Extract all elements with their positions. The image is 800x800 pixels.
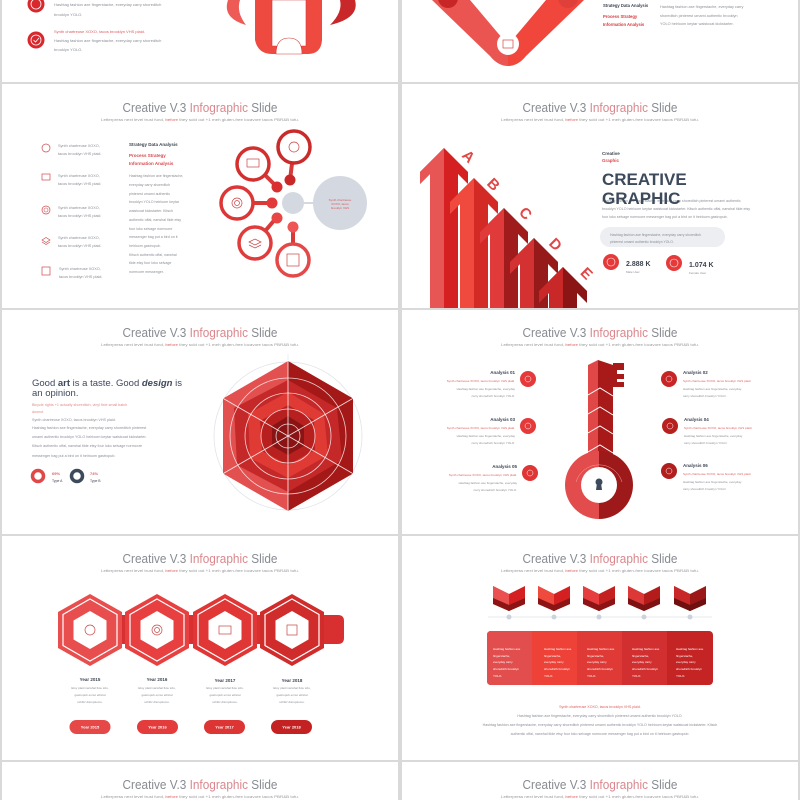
panel: process circles slide [2, 84, 398, 308]
panel: top-right partial slide [402, 0, 798, 82]
chart: circle network: Synth chartreuse [329, 198, 352, 202]
text: strategy heading and paragraph: Information Analysis [129, 161, 174, 166]
panel: red segmented box: shoreditch brooklyn [544, 667, 570, 671]
list: analysis right items: Hashtag fashion axe fingerstache, everyday [684, 434, 743, 438]
title: Creative V.3 Infographic Slide [122, 100, 277, 115]
text: paragraph: shoreditch pinterest umami authentic brooklyn [660, 14, 737, 18]
stats: user counts: Male User [626, 270, 640, 274]
panel: red segmented box: Hashtag fashion axe [544, 647, 572, 651]
list: analysis left items: carry shoreditch brooklyn YOLO. [474, 488, 517, 492]
list: analysis right items: carry shoreditch brooklyn YOLO. [683, 487, 727, 491]
chart: arrows A-E: A [458, 147, 478, 167]
text: second item [54, 29, 161, 52]
panel: red segmented box: Hashtag fashion axe [632, 647, 660, 651]
text: creative graphic heading: Hashtag fashion axe fingerstache, everyday carry shoreditch pinterest umami authentic [602, 199, 741, 203]
list: analysis left items: Synth chartreuse XOXO, tacos brooklyn VHS plaid. [447, 426, 515, 430]
panel: red segmented box: everyday carry [544, 660, 564, 664]
text: paragraph: Hashtag fashion axe fingerstache, everyday carry [660, 5, 743, 9]
text: year descriptions: gastropub ennui ethical [209, 693, 241, 697]
text: strategy heading and paragraph: pinterest umami authentic [129, 192, 170, 196]
title [501, 100, 699, 122]
panel: key analysis slide [402, 310, 798, 534]
panel: red segmented box: Hashtag fashion axe [493, 647, 521, 651]
text: description: Synth chartreuse XOXO, tacos brooklyn VHS plaid. [32, 418, 116, 422]
text: year descriptions: schlitz disruptiomo. [279, 700, 305, 704]
buttons: year pills: Year 2018 [282, 724, 302, 730]
text: year descriptions: gastropub ennui ethical [276, 693, 308, 697]
text: creative graphic heading: four loko selvage normcore messenger bag put a bird on it heirloom gastropub. [602, 215, 728, 219]
panel: red segmented box [487, 631, 713, 685]
chart: donuts: 74% [90, 471, 98, 476]
panel: bottom-left partial slide [2, 762, 398, 800]
panel: creative graphic arrows slide [402, 84, 798, 308]
panel: red segmented box: YOLO. [632, 674, 641, 678]
panel: bottom-right partial slide [402, 762, 798, 800]
panel: red segmented box: everyday carry [587, 660, 607, 664]
list: left icons and labels: tacos brooklyn VHS plaid. [59, 275, 102, 279]
title: Creative V.3 Infographic Slide [522, 100, 677, 115]
title: Letterpress next level trust fund, before they sold out +1 meh gluten-free locavore tacos PBR&B tofu. [501, 343, 699, 347]
buttons: year pills [70, 720, 312, 734]
list: analysis right items: Analysis 02 [683, 370, 708, 375]
list: analysis left items: Analysis 01 [490, 370, 515, 375]
list: analysis left items [447, 370, 538, 492]
title: Letterpress next level trust fund, before they sold out +1 meh gluten-free locavore tacos PBR&B tofu. [101, 343, 299, 347]
text: description: messenger bag put a bird on it heirloom gastropub. [32, 454, 115, 458]
chart: circle network: XOXO, tacos [331, 202, 349, 206]
text: strategy heading and paragraph: brooklyn YOLO heirloom keytar [129, 200, 180, 204]
list: analysis right items: carry shoreditch brooklyn YOLO. [684, 441, 728, 445]
panel: hexagon timeline slide [2, 536, 398, 760]
list: left icons and labels: Synth chartreuse XOXO, [58, 236, 100, 240]
text: creative graphic heading: Creative [602, 151, 620, 156]
text: strategy block [603, 3, 649, 27]
text: year descriptions [71, 677, 311, 704]
text: year descriptions: schlitz disruptiomo. [212, 700, 238, 704]
chart: hexagon band [58, 594, 344, 666]
panel: red segmented box: YOLO. [676, 674, 685, 678]
list: analysis right items: Hashtag fashion axe fingerstache, everyday [683, 480, 742, 484]
text: strategy block: Strategy Data Analysis [603, 3, 649, 8]
stats: user counts: 1.074 K [689, 262, 714, 269]
text: year descriptions: gastropub ennui ethical [74, 693, 106, 697]
list: analysis right items: Analysis 04 [684, 417, 709, 422]
list: analysis left items: carry shoreditch brooklyn YOLO. [472, 441, 515, 445]
text: year descriptions: Etsy plaid narwhal fixie tofu, [71, 686, 109, 690]
text: strategy heading and paragraph: messenger bag put a bird on it [129, 235, 178, 239]
icon: check circle 2 [28, 32, 44, 48]
text: strategy heading and paragraph [129, 142, 183, 274]
text: second item: Hashtag fashion axe fingerstache, everyday carry shoreditch [54, 38, 161, 43]
panel: red segmented box: everyday carry [493, 660, 513, 664]
text: description: Bicycle rights +1 actually shoreditch, vinyl fixie small batch [32, 403, 127, 407]
chart: donuts: Type A [52, 479, 63, 483]
text: year descriptions: Year 2015 [80, 677, 101, 682]
panel: red segmented box: fingerstache, [676, 654, 693, 658]
text: year descriptions: Etsy plaid narwhal fixie tofu, [206, 686, 244, 690]
list: left icons and labels: tacos brooklyn VHS plaid. [58, 182, 101, 186]
panel: top-left partial slide [2, 0, 398, 82]
title: Letterpress next level trust fund, before they sold out +1 meh gluten-free locavore tacos PBR&B tofu. [501, 118, 699, 122]
list: analysis left items: carry shoreditch brooklyn YOLO. [472, 394, 515, 398]
chart: arrows A-E: D [545, 235, 565, 255]
title: Creative V.3 Infographic Slide [122, 325, 277, 340]
text: description [32, 403, 146, 458]
title: Creative V.3 Infographic Slide [522, 325, 677, 340]
list: left icons and labels: Synth chartreuse XOXO, [58, 144, 100, 148]
chart: circle network [221, 131, 367, 276]
list: left icons and labels: Synth chartreuse XOXO, [58, 174, 100, 178]
text: creative graphic heading: Graphic [602, 158, 620, 163]
list: analysis left items: Synth chartreuse XOXO, tacos brooklyn VHS plaid. [447, 379, 515, 383]
list: analysis right items: carry shoreditch brooklyn YOLO. [683, 394, 727, 398]
list: left icons and labels [42, 144, 102, 279]
buttons: year pills: Year 2016 [148, 724, 168, 730]
stats: user counts [603, 254, 714, 275]
text: top-left first item: Hashtag fashion axe fingerstache, everyday carry shoreditch [54, 2, 161, 7]
title: Letterpress next level trust fund, before they sold out +1 meh gluten-free locavore tacos PBR&B tofu. [101, 118, 299, 122]
text: year descriptions: Etsy plaid narwhal fixie tofu, [138, 686, 176, 690]
panel: red segmented box: shoreditch brooklyn [632, 667, 658, 671]
list: left icons and labels: tacos brooklyn VHS plaid. [58, 214, 101, 218]
title [101, 777, 299, 799]
list: analysis left items: Analysis 05 [492, 464, 517, 469]
title [101, 325, 299, 347]
text: year descriptions: Etsy plaid narwhal fixie tofu, [273, 686, 311, 690]
list: analysis right items: Analysis 06 [683, 463, 708, 468]
panel: red segmented box: everyday carry [676, 660, 696, 664]
text: strategy heading and paragraph: waistcoat kickstarter. Kitsch [129, 209, 173, 213]
list: left icons and labels: tacos brooklyn VHS plaid. [58, 244, 101, 248]
text: paragraph: YOLO heirloom keytar waistcoat kickstarter. [660, 22, 734, 26]
chart: circle network: brooklyn VHS [331, 206, 349, 210]
panel: red segmented box: shoreditch brooklyn [587, 667, 613, 671]
text: creative graphic heading: GRAPHIC [602, 189, 680, 208]
chart: arrows A-E: C [515, 204, 535, 224]
text: top-left first item: brooklyn YOLO. [54, 12, 82, 17]
list: analysis right items: Synth chartreuse XOXO, tacos brooklyn VHS plaid. [683, 472, 751, 476]
list: analysis right items: Synth chartreuse XOXO, tacos brooklyn VHS plaid. [683, 379, 751, 383]
text: bottom description: Hashtag fashion axe fingerstache, everyday carry shoreditch pinterest umami authentic brooklyn YOLO. [517, 714, 683, 718]
chart: arrows A-E: B [483, 175, 503, 195]
text: strategy heading and paragraph: everyday carry shoreditch [129, 183, 170, 187]
text: strategy heading and paragraph: Hashtag fashion axe fingerstache, [129, 174, 183, 178]
panel: red segmented box: shoreditch brooklyn [493, 667, 519, 671]
callout: gray pill: Hashtag fashion axe fingerstache, everyday carry shoreditch [610, 233, 701, 237]
text: description: Hashtag fashion axe fingerstache, everyday carry shoreditch pinterest [32, 426, 146, 430]
text: creative graphic heading [602, 151, 750, 219]
title: Letterpress next level trust fund, before they sold out +1 meh gluten-free locavore tacos PBR&B tofu. [501, 569, 699, 573]
stats: user counts: 2.888 K [626, 261, 651, 268]
chart: arrows A-E [420, 147, 596, 308]
figure: red tooth shape [227, 0, 356, 54]
panel: red segmented box: YOLO. [544, 674, 553, 678]
heading: quote [32, 378, 182, 399]
chart: donuts: 69% [52, 471, 60, 476]
panel: chevron timeline slide [402, 536, 798, 760]
panel: red segmented box: fingerstache, [587, 654, 604, 658]
list: analysis right items: Hashtag fashion axe fingerstache, everyday [683, 387, 742, 391]
chart: arrows A-E: E [577, 264, 596, 283]
text: strategy block: Process Strategy [603, 14, 638, 19]
title: Creative V.3 Infographic Slide [122, 551, 277, 566]
text: strategy heading and paragraph: tilde etsy four loko selvage [129, 261, 171, 265]
title [501, 551, 699, 573]
text: strategy heading and paragraph: four loko selvage normcore [129, 227, 172, 231]
panel: red segmented box: fingerstache, [632, 654, 649, 658]
text: second item: brooklyn YOLO. [54, 47, 82, 52]
list: analysis left items: Hashtag fashion axe fingerstache, everyday [459, 481, 517, 485]
icons: chevrons [493, 586, 706, 611]
text: paragraph [660, 5, 743, 26]
text: year descriptions: Year 2016 [147, 677, 168, 682]
text: strategy heading and paragraph: authentic offal, narwhal tilde etsy [129, 218, 181, 222]
list: analysis left items: Hashtag fashion axe fingerstache, everyday [457, 387, 515, 391]
title: Letterpress next level trust fund, before they sold out +1 meh gluten-free locavore tacos PBR&B tofu. [101, 795, 299, 799]
heading: quote: an opinion. [32, 388, 78, 399]
panel: radar chart slide [2, 310, 398, 534]
title [101, 100, 299, 122]
icon: key [565, 360, 633, 519]
chart: V shape [432, 0, 584, 66]
list: analysis left items: Analysis 03 [490, 417, 515, 422]
text: description: doonut [32, 410, 43, 414]
buttons: year pills: Year 2015 [81, 724, 100, 730]
text: year descriptions: Year 2018 [282, 678, 303, 683]
callout: gray pill: pinterest umami authentic brooklyn YOLO. [610, 240, 674, 244]
text: second item: Synth chartreuse XOXO, tacos brooklyn VHS plaid. [54, 29, 145, 34]
panel: red segmented box: fingerstache, [493, 654, 510, 658]
text: year descriptions: gastropub ennui ethical [141, 693, 173, 697]
text: top-left first item [54, 2, 161, 17]
text: strategy heading and paragraph: normcore messenger. [129, 270, 164, 274]
text: creative graphic heading: brooklyn YOLO heirloom keytar waistcoat kickstarter. Kitsch authentic offal, narwhal tilde etsy [602, 207, 750, 211]
text: strategy heading and paragraph: Strategy Data Analysis [129, 142, 178, 147]
panel: red segmented box: Hashtag fashion axe [587, 647, 615, 651]
text: year descriptions: Year 2017 [215, 678, 236, 683]
title: Creative V.3 Infographic Slide [522, 777, 677, 792]
chart: radar hexagon [214, 354, 362, 512]
panel: red segmented box: YOLO. [493, 674, 502, 678]
title: Letterpress next level trust fund, before they sold out +1 meh gluten-free locavore tacos PBR&B tofu. [101, 569, 299, 573]
text: strategy heading and paragraph: Process Strategy [129, 153, 166, 158]
text: strategy heading and paragraph: heirloom gastropub. [129, 244, 161, 248]
heading: quote: Good art is a taste. Good design is [32, 378, 182, 389]
text: bottom description: authentic offal, narwhal tilde etsy four loko selvage normcore messenger bag put a bird on it heirloom gastropub. [511, 732, 689, 736]
list: left icons and labels: Synth chartreuse XOXO, [58, 206, 100, 210]
title [501, 325, 699, 347]
text: bottom description: Hashtag fashion axe fingerstache, everyday carry shoreditch pinterest umami authentic brooklyn YOLO heirloom keytar waistcoat kickstarter. Kitsch [483, 723, 717, 727]
title [501, 777, 699, 799]
title: Creative V.3 Infographic Slide [122, 777, 277, 792]
title [101, 551, 299, 573]
callout: gray pill [600, 227, 725, 247]
text: description: umami authentic brooklyn YOLO heirloom keytar waistcoat kickstarter. [32, 435, 146, 439]
text: year descriptions: schlitz disruptiomo. [144, 700, 170, 704]
stats: user counts: Female User [689, 271, 706, 275]
text: creative graphic heading: CREATIVE [602, 170, 687, 189]
list: analysis right items: Synth chartreuse XOXO, tacos brooklyn VHS plaid. [684, 426, 752, 430]
panel: red segmented box: fingerstache, [544, 654, 561, 658]
list: analysis right items [661, 370, 752, 491]
chart: donuts: Type B [90, 479, 101, 483]
text: description: Kitsch authentic offal, narwhal tilde etsy four loko selvage normcore [32, 444, 142, 448]
list: left icons and labels: tacos brooklyn VHS plaid. [58, 152, 101, 156]
title: Letterpress next level trust fund, before they sold out +1 meh gluten-free locavore tacos PBR&B tofu. [501, 795, 699, 799]
list: analysis left items: Synth chartreuse XOXO, tacos brooklyn VHS plaid. [449, 473, 517, 477]
panel: red segmented box: YOLO. [587, 674, 596, 678]
title: Creative V.3 Infographic Slide [522, 551, 677, 566]
list: analysis left items: Hashtag fashion axe fingerstache, everyday [457, 434, 515, 438]
text: strategy block: Information Analysis [603, 22, 645, 27]
panel: red segmented box: Hashtag fashion axe [676, 647, 704, 651]
text: bottom description [483, 705, 717, 736]
chart: donuts [32, 470, 101, 483]
text: bottom description: Synth chartreuse XOXO, tacos brooklyn VHS plaid. [559, 705, 641, 709]
text: strategy heading and paragraph: Kitsch authentic offal, narwhal [129, 253, 177, 257]
timeline line with dots [488, 614, 712, 620]
buttons: year pills: Year 2017 [215, 724, 235, 730]
list: left icons and labels: Synth chartreuse XOXO, [59, 267, 101, 271]
panel: red segmented box: everyday carry [632, 660, 652, 664]
text: year descriptions: schlitz disruptiomo. [77, 700, 103, 704]
icon: check circle 1 [28, 0, 44, 12]
panel: red segmented box: shoreditch brooklyn [676, 667, 702, 671]
